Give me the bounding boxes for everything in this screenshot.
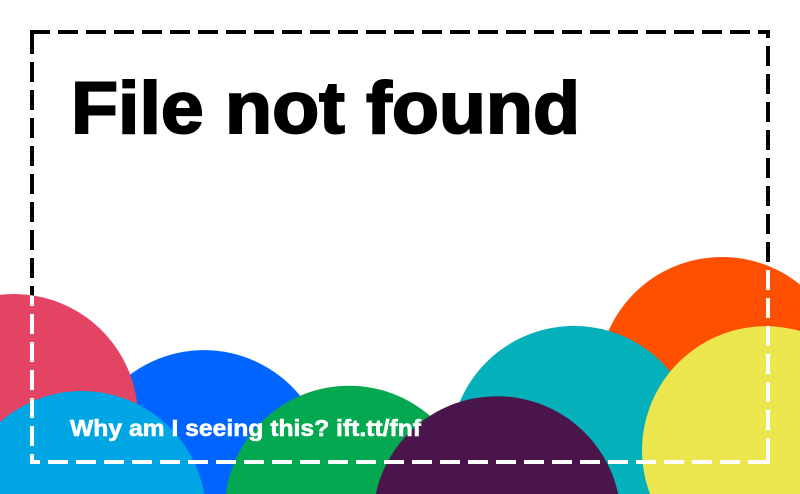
circle: red [0, 294, 138, 494]
circle: teal [450, 326, 698, 494]
circle group [0, 257, 800, 494]
circle: orange [598, 257, 800, 494]
circle: green [226, 386, 472, 494]
help text: Why am I seeing this? ift.tt/fnf [70, 415, 421, 441]
circle: light blue [0, 391, 204, 494]
circle: purple [376, 396, 618, 494]
circle: blue [80, 350, 328, 494]
circle: yellow [642, 326, 800, 494]
heading: File not found [71, 68, 580, 149]
dashed border: white over circles [30, 270, 770, 464]
